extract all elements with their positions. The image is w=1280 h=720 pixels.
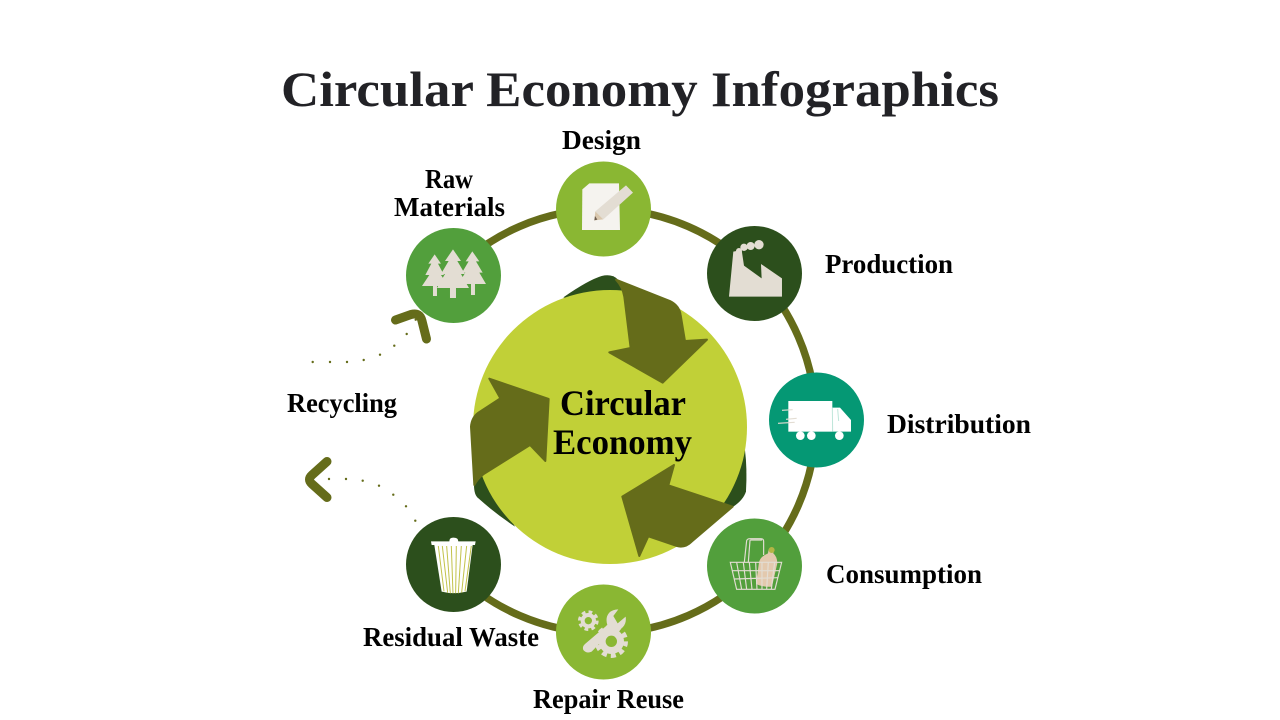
title: Circular Economy Infographics [281, 61, 999, 117]
label: raw materials: Materials [394, 192, 505, 222]
icon: delivery truck [778, 401, 851, 440]
stage: repair reuse [556, 584, 651, 680]
label: design: Design [562, 125, 641, 155]
icon: pine trees [422, 249, 486, 298]
stage: design [556, 162, 651, 256]
central label: Circular [560, 383, 686, 423]
label: distribution: Distribution [887, 409, 1031, 439]
stage: raw materials [406, 228, 501, 323]
icon: wrench and gears [580, 609, 626, 656]
label: repair reuse: Repair Reuse [533, 684, 684, 714]
arrow: recycling to raw materials [312, 314, 426, 363]
label: recycling: Recycling [287, 388, 397, 418]
stage: consumption [707, 518, 802, 614]
icon: paper and pencil [582, 183, 633, 230]
ring connecting the stages [454, 209, 816, 633]
stage: production [707, 226, 802, 321]
stage: residual waste [406, 517, 501, 612]
dark green arrow backing [474, 275, 746, 527]
arrow: residual waste to recycling [310, 462, 416, 522]
label: raw materials: Raw [425, 164, 473, 194]
icon: factory [729, 240, 782, 297]
icon: shopping basket [730, 539, 782, 589]
label: consumption: Consumption [826, 559, 982, 589]
icon: trash can [431, 538, 476, 593]
central label: Economy [553, 422, 692, 462]
label: raw materials [394, 164, 505, 222]
stage: distribution [769, 372, 864, 468]
central recycling emblem [471, 275, 747, 564]
central label [553, 383, 692, 462]
label: production: Production [825, 249, 953, 279]
central circle [473, 290, 747, 564]
olive arrows [471, 280, 733, 556]
label: residual waste: Residual Waste [363, 622, 539, 652]
